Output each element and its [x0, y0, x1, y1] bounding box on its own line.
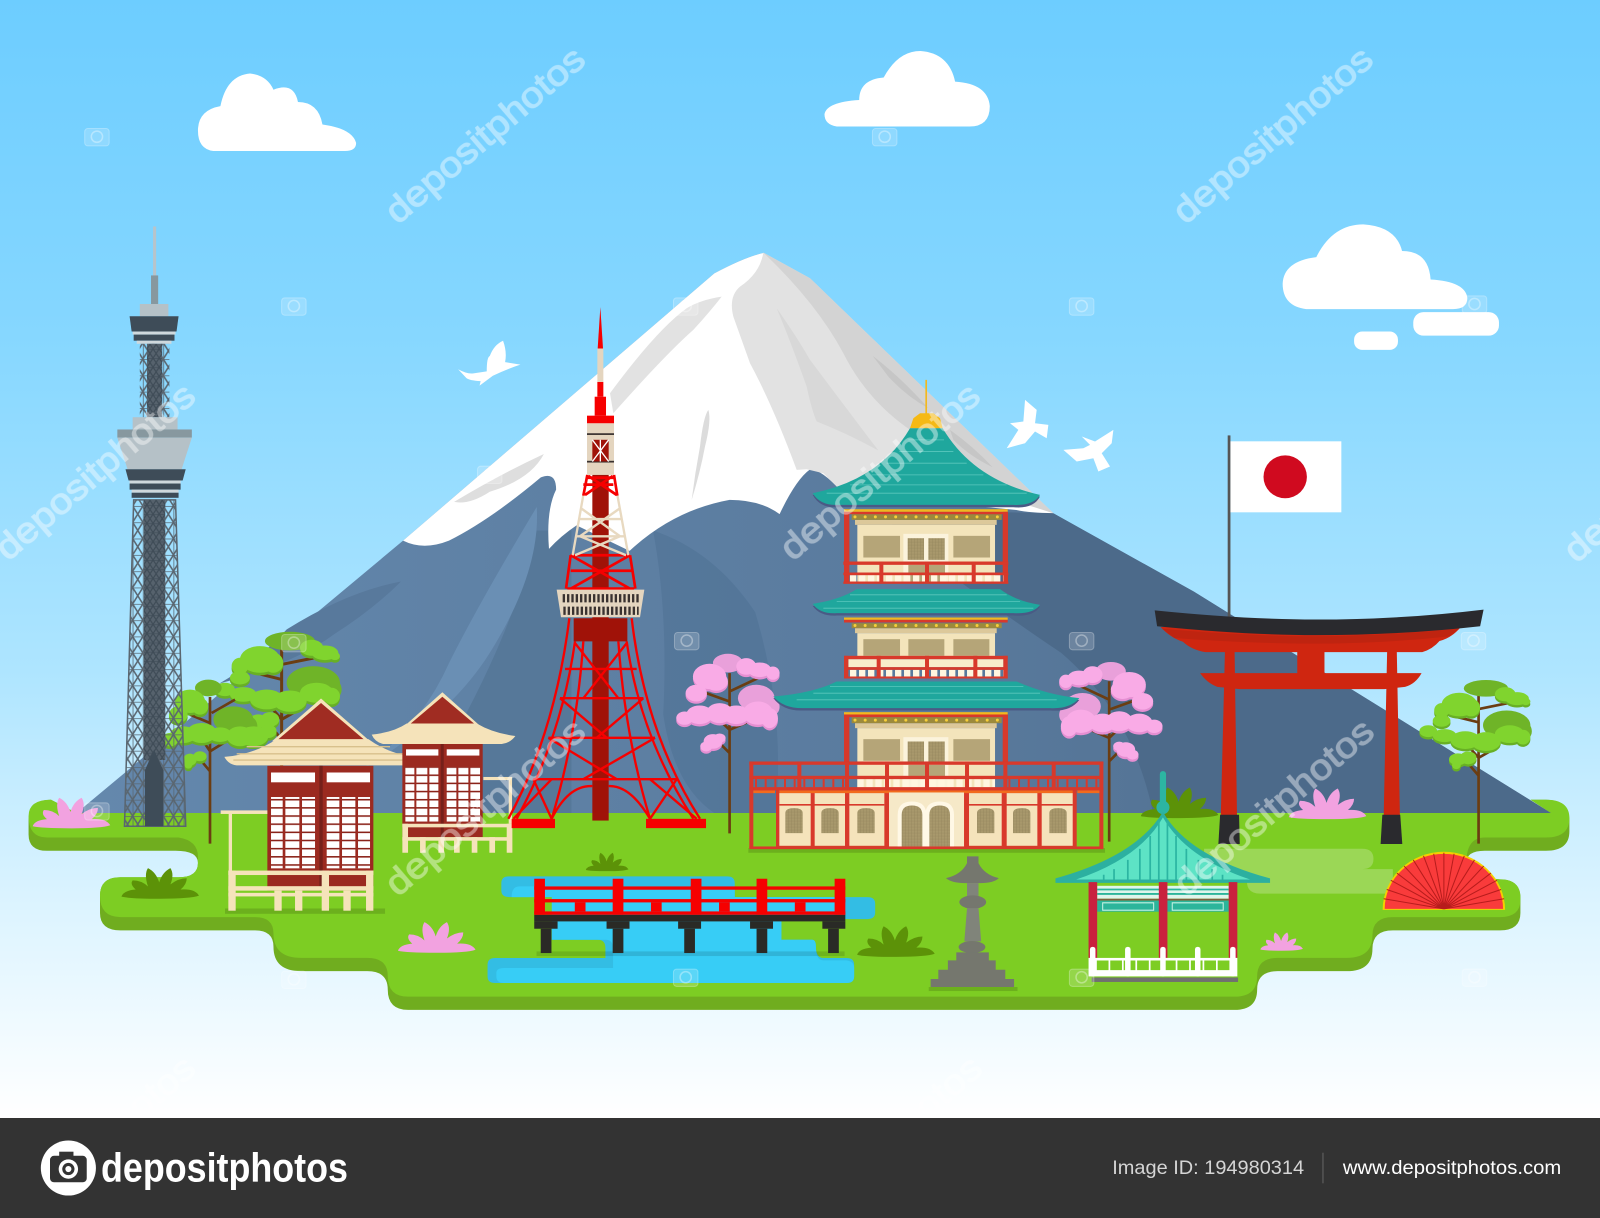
floor 2	[844, 618, 1008, 678]
ridge shading	[219, 581, 401, 683]
bridge shadow	[537, 951, 845, 956]
skytree main deck	[133, 417, 178, 429]
island: ground	[29, 800, 1569, 1010]
shoji screens	[271, 797, 315, 868]
roof eave	[224, 739, 415, 765]
roof 3	[773, 698, 1079, 711]
bush: pink centre	[398, 922, 476, 953]
roof gable	[272, 699, 370, 741]
bush: green by torii	[1141, 788, 1218, 818]
watermark text: depositphotos	[377, 711, 593, 904]
floor 1	[844, 712, 1008, 788]
flag pole	[1228, 435, 1230, 617]
fence	[402, 777, 512, 853]
shoji	[405, 767, 438, 822]
bush: green left	[121, 868, 199, 899]
gazebo	[1055, 771, 1270, 982]
gazebo roof	[1055, 812, 1270, 883]
skytree core	[145, 750, 163, 826]
torii roof	[1155, 610, 1484, 635]
snow cap	[403, 253, 1053, 551]
gazebo posts	[1089, 882, 1237, 958]
shadow	[225, 908, 385, 914]
gazebo railing	[1089, 958, 1237, 976]
windows	[406, 749, 438, 756]
mountain rock	[77, 253, 1551, 813]
arched windows	[785, 808, 1067, 833]
upper windows	[271, 773, 315, 782]
torii upper beam	[1161, 627, 1461, 652]
sliver	[692, 410, 709, 500]
stone lantern	[929, 856, 1018, 991]
bridge railing	[534, 879, 845, 915]
snow patch left	[454, 454, 544, 502]
bush: green centre	[857, 926, 935, 957]
watermark text: depositphotos	[772, 375, 988, 568]
cloud: small lower pill	[1354, 332, 1398, 350]
snow shadows	[610, 253, 1053, 513]
mountain: Mount Fuji	[77, 253, 1551, 813]
walls	[402, 744, 483, 837]
tower feet	[512, 819, 555, 828]
pagoda	[748, 380, 1105, 853]
skytree antenna	[153, 226, 156, 277]
observation block	[574, 618, 627, 641]
tree: pine front left	[162, 680, 277, 844]
tree: pine right	[1419, 680, 1532, 844]
Tokyo Skytree	[117, 226, 192, 826]
grey right face	[732, 253, 1053, 513]
streaks	[873, 356, 993, 467]
Tokyo Tower	[508, 307, 706, 828]
cloud: small right pill	[1413, 312, 1499, 336]
central door	[889, 792, 964, 846]
torii gate	[1155, 435, 1484, 844]
torii feet	[1218, 815, 1402, 844]
website: www.depositphotos.com	[1342, 1157, 1561, 1179]
house walls	[267, 766, 373, 891]
skytree upper deck	[140, 304, 168, 316]
divider	[1322, 1153, 1323, 1183]
tower core	[592, 474, 609, 821]
skytree upper lattice	[140, 344, 169, 417]
logo icon	[41, 1140, 96, 1196]
tree: pine back left	[215, 632, 342, 816]
gable	[405, 692, 479, 725]
watermark text: depositphotos	[377, 39, 593, 232]
house: left double-door pavilion	[221, 699, 415, 914]
bridge	[534, 879, 845, 956]
watermark text: depositphotos	[1166, 711, 1382, 904]
fence	[221, 810, 373, 911]
island side	[29, 800, 1569, 1010]
left fold	[610, 297, 722, 413]
birds right	[1007, 400, 1113, 472]
bridge piers	[534, 915, 845, 953]
folding fan	[1383, 852, 1505, 910]
Japanese flag	[1230, 441, 1341, 512]
beige lattice	[573, 495, 628, 555]
tree: sakura left	[676, 654, 780, 833]
watermark cameras	[85, 129, 1487, 988]
island top	[29, 800, 1569, 997]
house: small rear pavilion	[372, 692, 515, 853]
roof 1	[813, 495, 1040, 507]
gazebo finial	[1160, 771, 1166, 804]
bird left	[458, 341, 520, 386]
bush: green top	[586, 853, 628, 871]
floor 3 (top)	[843, 509, 1008, 584]
skytree lower lattice	[124, 500, 186, 826]
watermark text: depositphotos	[1165, 39, 1381, 232]
birds	[458, 341, 1113, 472]
shadow	[748, 848, 1105, 853]
ground floor	[749, 790, 1103, 849]
roof 2	[813, 606, 1040, 616]
eave	[372, 723, 515, 744]
cloud: top left	[198, 73, 356, 151]
cloud: right	[1283, 224, 1467, 309]
upper red section	[583, 475, 617, 496]
tree: sakura right	[1059, 662, 1163, 842]
central fold	[777, 308, 878, 451]
darker slope band	[763, 253, 1053, 513]
tower legs and braces	[508, 618, 700, 819]
finial	[925, 380, 927, 415]
garden path patch	[1204, 849, 1393, 894]
bush: pink left	[33, 798, 110, 828]
logo wordmark: depositphotos	[101, 1144, 348, 1190]
spire	[587, 416, 614, 423]
upper deck	[587, 423, 614, 475]
cloud: top centre	[824, 51, 990, 126]
gazebo lattice and panels	[1097, 886, 1229, 912]
observation deck	[557, 590, 644, 617]
right side shading	[878, 510, 1551, 813]
bush: pink small	[1260, 932, 1303, 951]
image id: Image ID: 194980314	[1112, 1157, 1304, 1179]
bush: pink by torii	[1289, 789, 1366, 819]
torii legs	[1200, 651, 1422, 816]
footer bar	[0, 1118, 1600, 1218]
pond	[488, 876, 875, 983]
lower balcony railing	[749, 761, 1103, 848]
red mid section	[566, 555, 635, 589]
